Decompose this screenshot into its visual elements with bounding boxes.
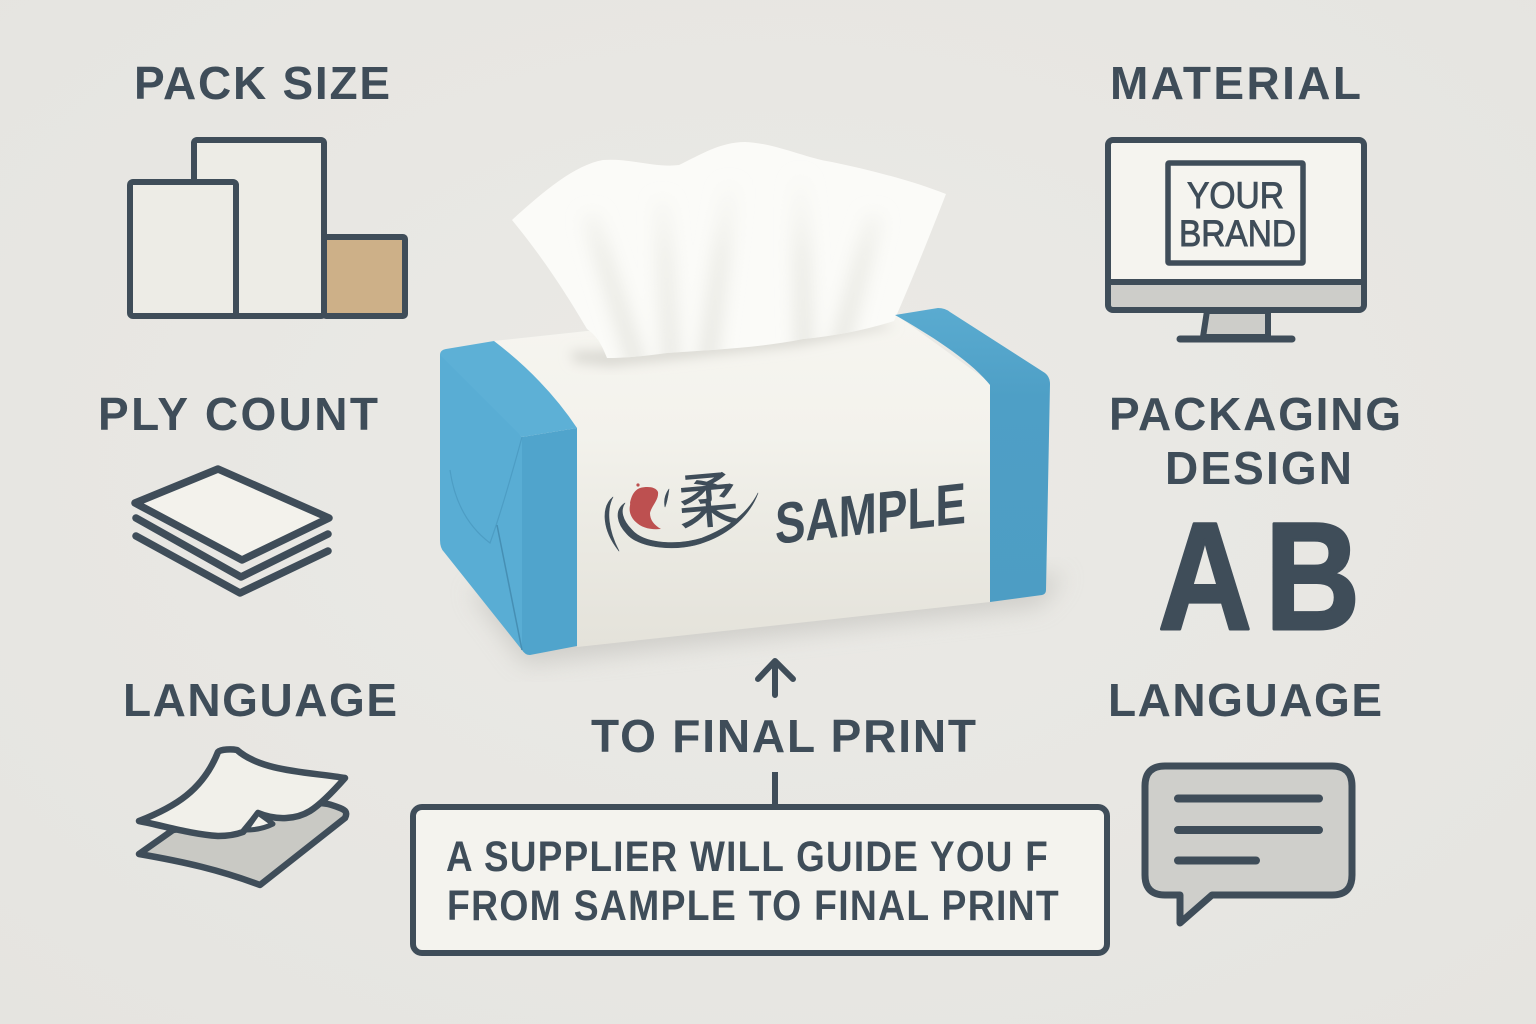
logo dot — [636, 483, 640, 487]
icon: pack size rectangles — [130, 140, 405, 316]
left blue end — [440, 341, 577, 655]
tissue sheet — [512, 142, 946, 358]
end face — [440, 349, 522, 650]
large letters AB: B — [1265, 492, 1360, 662]
logo character: 柔 — [675, 466, 741, 537]
large letters AB: A — [1158, 491, 1252, 662]
logo heart — [630, 487, 661, 529]
brand logo — [605, 466, 758, 551]
crease — [497, 525, 522, 650]
large letters AB — [1158, 491, 1360, 662]
label: to final print: TO FINAL PRINT — [591, 710, 976, 762]
callout: A SUPPLIER WILL GUIDE YOU F — [446, 833, 1049, 881]
front band — [500, 428, 577, 655]
icon: stacked sheets — [135, 469, 329, 593]
heading: packaging design: DESIGN — [1165, 442, 1352, 494]
top wedge — [440, 341, 577, 437]
heading: material: MATERIAL — [1110, 57, 1361, 109]
heading: pack size: PACK SIZE — [134, 57, 390, 109]
callout connector — [772, 772, 778, 807]
icon: monitor with brand — [1108, 140, 1364, 339]
icon: speech bubble — [1145, 766, 1352, 923]
fold flap — [450, 437, 522, 543]
logo strokes — [605, 489, 758, 551]
heading: language right: LANGUAGE — [1108, 674, 1382, 726]
heading: packaging design — [1109, 388, 1401, 494]
sample label: SAMPLE — [775, 471, 966, 557]
icon: curling paper — [139, 749, 346, 885]
slot shadow — [570, 322, 895, 366]
right blue end — [895, 308, 1050, 602]
arrow up — [758, 661, 793, 695]
icon: monitor with brand: BRAND — [1179, 213, 1296, 254]
heading: language left: LANGUAGE — [123, 674, 397, 726]
white band — [494, 314, 992, 647]
heading: ply count: PLY COUNT — [98, 388, 378, 440]
callout — [413, 807, 1107, 953]
icon: monitor with brand: YOUR — [1187, 175, 1284, 216]
shadow under pack — [470, 575, 1065, 664]
heading: packaging design: PACKAGING — [1109, 388, 1401, 440]
callout: FROM SAMPLE TO FINAL PRINT — [447, 882, 1060, 930]
product: tissue pack — [440, 130, 1065, 664]
